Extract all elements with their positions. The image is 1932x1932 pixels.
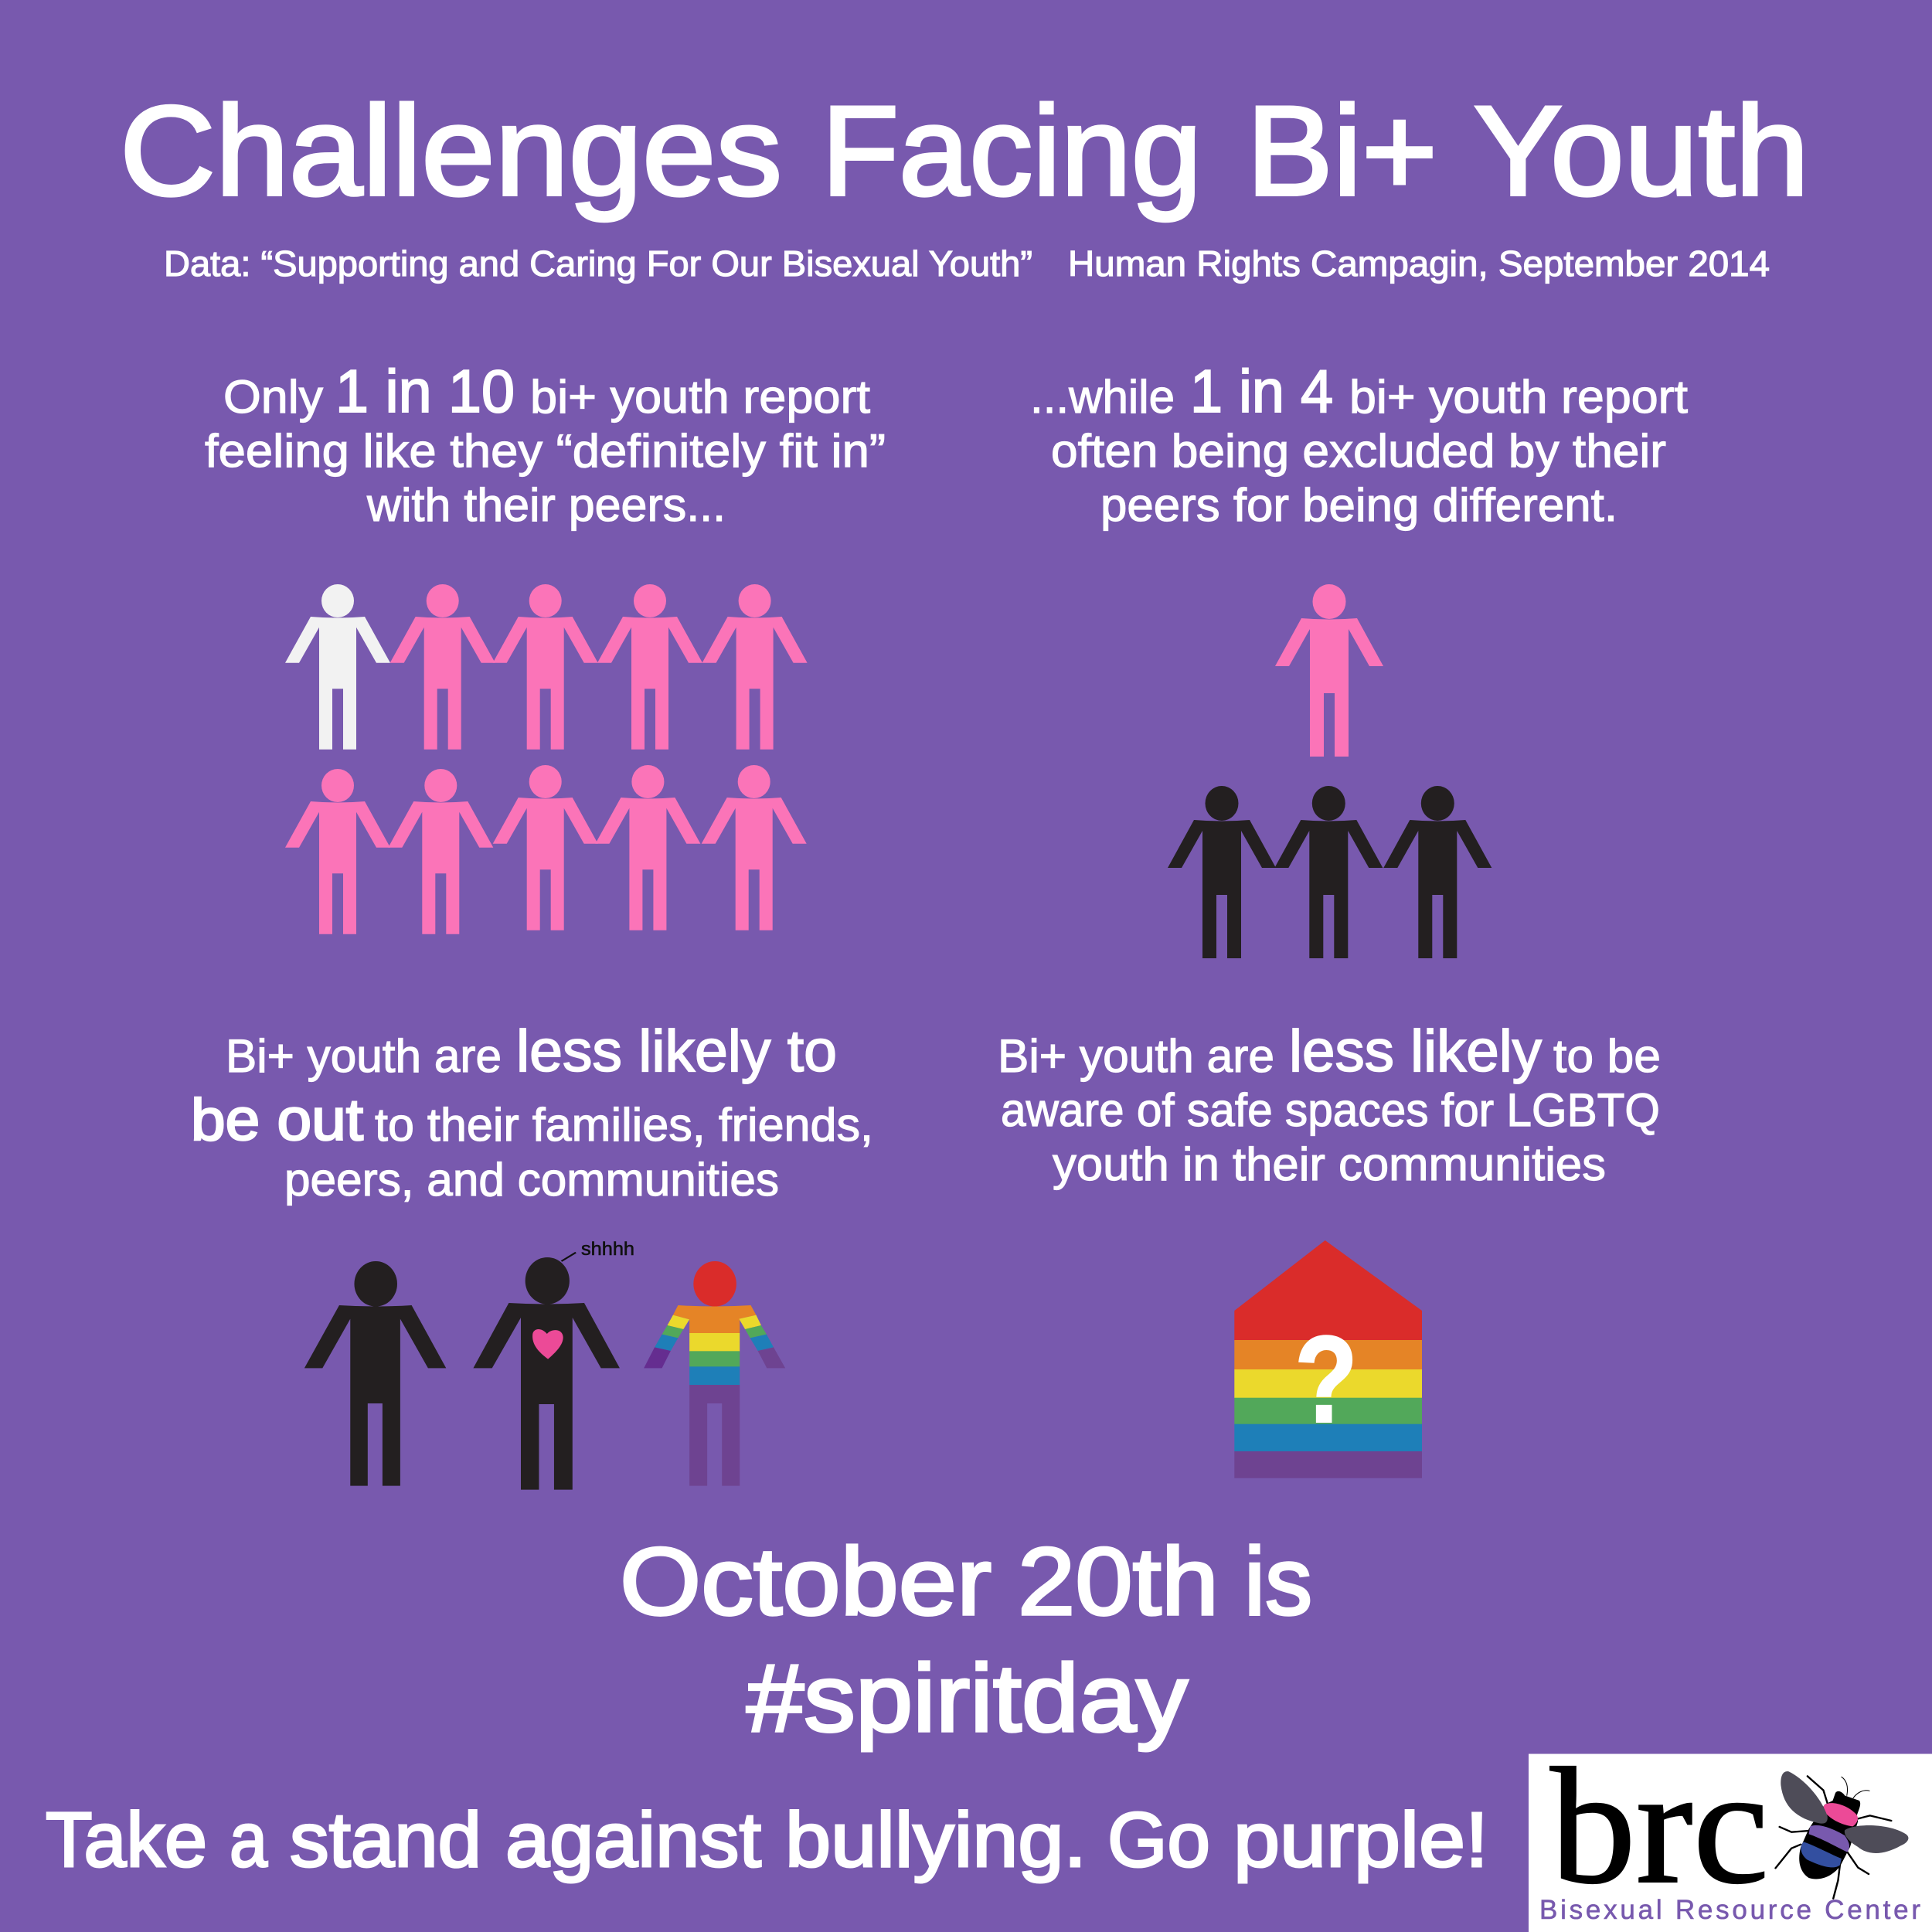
text block: less likely to be out xyxy=(191,1019,873,1206)
title: Bi+ xyxy=(1247,80,1437,222)
text block: less likely to be out: Bi+ youth are xyxy=(226,1030,502,1082)
panel: 1 in 10 fit in xyxy=(205,357,886,934)
icon: rainbow house with question mark: ? xyxy=(1294,1310,1358,1448)
title: Challenges xyxy=(120,80,782,222)
text block: 1 in 10: with their peers... xyxy=(366,479,726,531)
text block: less likely to be out: be out xyxy=(191,1087,363,1153)
heading: October 20th is: 20th xyxy=(1018,1529,1219,1635)
pictogram: ten people, one white xyxy=(285,584,808,934)
panel: less likely to be out xyxy=(191,1019,873,1490)
figure: rainbow person xyxy=(644,1261,785,1486)
text block: less likely to be out: peers, and communities xyxy=(284,1154,779,1206)
logo: Bisexual Resource Center xyxy=(1529,1733,1932,1932)
text block: 1 in 10: bi+ youth report xyxy=(530,371,870,423)
title xyxy=(120,80,1809,222)
text block: 1 in 4: often being excluded by their xyxy=(1051,425,1666,477)
text block: safe spaces: youth in their communities xyxy=(1053,1138,1606,1190)
text block: safe spaces: less likely xyxy=(1289,1019,1542,1084)
logo: Bisexual Resource Center: brc xyxy=(1550,1733,1769,1918)
title: Facing xyxy=(821,80,1202,222)
text block: safe spaces: Bi+ youth are xyxy=(998,1030,1274,1082)
text block: 1 in 4 xyxy=(1030,357,1688,531)
text block: 1 in 10: 1 in 10 xyxy=(335,357,515,425)
label: shhhh: shhhh xyxy=(581,1239,634,1260)
panel: 1 in 4 excluded xyxy=(1030,357,1688,958)
text block: 1 in 4: 1 in 4 xyxy=(1190,357,1333,425)
call to action: against xyxy=(505,1797,761,1883)
logo: Bisexual Resource Center: Bisexual Resource Center xyxy=(1539,1895,1920,1925)
call to action: Go xyxy=(1107,1797,1210,1883)
subtitle: data source xyxy=(164,243,1770,284)
text block: 1 in 4: ...while xyxy=(1030,371,1175,423)
text block: 1 in 4: bi+ youth report xyxy=(1349,371,1688,423)
icon: rainbow house with question mark xyxy=(1234,1240,1422,1478)
text block: safe spaces xyxy=(998,1019,1661,1190)
figure: black person xyxy=(304,1261,446,1486)
call to action: bullying. xyxy=(785,1797,1087,1883)
text block: less likely to be out: less likely to xyxy=(516,1019,837,1084)
heading: October 20th is: October xyxy=(620,1529,992,1635)
text block: 1 in 10: Only xyxy=(223,371,323,423)
text block: 1 in 10: feeling like they “definitely fit in” xyxy=(205,425,886,477)
text block: 1 in 10 xyxy=(205,357,886,531)
subtitle: data source: Human Rights Campagin, September 2014 xyxy=(1068,243,1770,284)
text block: safe spaces: aware of safe spaces for LGBTQ xyxy=(1001,1084,1660,1136)
subtitle: data source: Data: “Supporting and Caring For Our Bisexual Youth” xyxy=(164,243,1032,284)
panel: less aware of safe spaces xyxy=(998,1019,1661,1478)
call to action: stand xyxy=(290,1797,481,1883)
call to action: a xyxy=(230,1797,267,1883)
text block: safe spaces: to be xyxy=(1553,1030,1661,1082)
pictogram: one pink person above three black people xyxy=(1168,584,1492,958)
figure: black person with pink heart xyxy=(473,1253,620,1490)
text block: less likely to be out: to their families, friends, xyxy=(375,1099,873,1151)
text block: 1 in 4: peers for being different. xyxy=(1100,479,1617,531)
call to action xyxy=(46,1797,1488,1883)
pictogram: three figures xyxy=(304,1239,785,1490)
heading: #spiritday: #spiritday xyxy=(747,1645,1188,1752)
call to action: purple! xyxy=(1233,1797,1488,1883)
heading: October 20th is xyxy=(620,1529,1312,1635)
icon: bee xyxy=(1776,1771,1908,1899)
title: Youth xyxy=(1474,80,1809,222)
call to action: Take xyxy=(46,1797,207,1883)
heading: October 20th is: is xyxy=(1244,1529,1312,1635)
